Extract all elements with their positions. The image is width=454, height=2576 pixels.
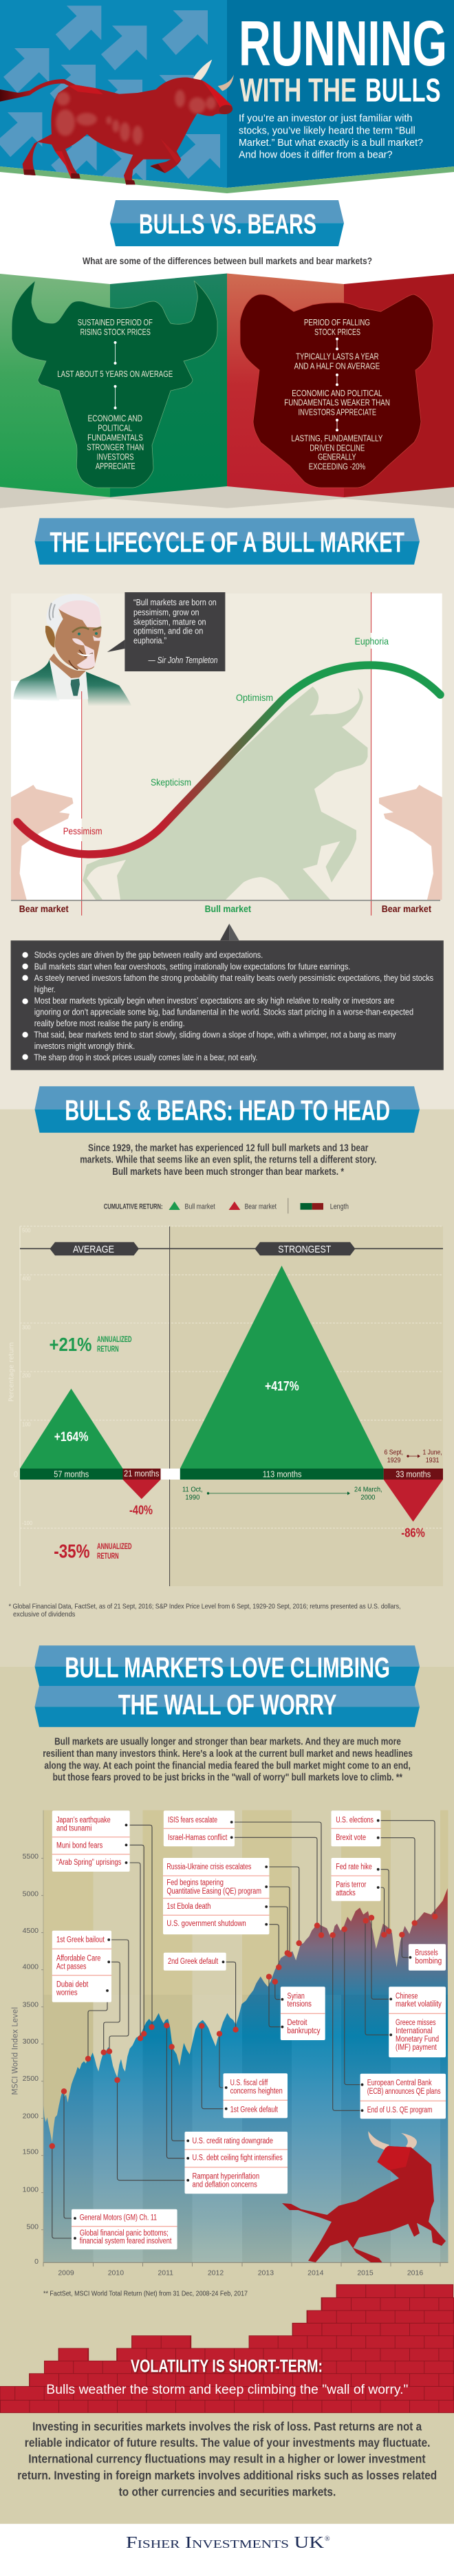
icon: rising arrows <box>0 6 220 193</box>
label: optimism: Optimism <box>236 692 273 703</box>
list: bear traits: ECONOMIC AND POLITICAL <box>292 389 382 398</box>
chart: MSCI World index with headlines <box>10 1810 448 2277</box>
footer logo <box>0 2524 454 2576</box>
callout: 2009 crisis: Global financial panic bottoms; <box>80 2229 169 2238</box>
callout: fiscal cliff: concerns heighten <box>230 2087 283 2095</box>
footnote: index source: ** FactSet, MSCI World Total Return (Net) from 31 Dec, 2008-24 Feb, 2017 <box>43 2289 248 2297</box>
legend: Bull market <box>184 1202 215 1211</box>
axis: years: 2009 <box>58 2269 74 2277</box>
label: average <box>50 1242 139 1255</box>
callout: China and Greece: International <box>396 2027 432 2035</box>
dates: strongest bear: 1931 <box>426 1456 440 1464</box>
callout: Templeton quote <box>107 592 225 671</box>
icon: bear head <box>240 294 433 488</box>
panel: bear market traits <box>227 274 454 497</box>
list: bear traits <box>284 318 390 472</box>
annualized bear return: RETURN <box>97 1551 119 1561</box>
intro text: And how does it differ from a bear? <box>239 149 392 160</box>
title <box>239 8 447 109</box>
panel: header <box>0 0 454 193</box>
dates: strongest bull: 2000 <box>360 1493 376 1502</box>
callout: 2009-2010 headlines: Act passes <box>56 1962 87 1971</box>
text: wall of worry intro <box>43 1737 413 1784</box>
heading: wall of worry <box>34 1645 420 1727</box>
callout: China and Greece: market volatility <box>396 2000 442 2009</box>
callout: 2011 US concerns <box>184 2132 288 2194</box>
list: bull traits <box>57 318 173 471</box>
axis: years: 2012 <box>208 2269 224 2277</box>
panel: lifecycle notes: Stocks cycles are driven by the gap between reality and expectations. <box>34 951 263 960</box>
label: bull market: Bull market <box>205 903 251 914</box>
list: bull traits: APPRECIATE <box>96 462 136 471</box>
axis labels: 200 <box>22 1373 31 1379</box>
axis labels: 100 <box>22 1421 31 1427</box>
callout: Templeton quote: pessimism, grow on <box>133 607 199 617</box>
icon: red bull climbing <box>282 2131 446 2262</box>
text: head to head intro: markets. While that seems like an even split, the returns tell a different story. <box>80 1155 377 1166</box>
callout: Brussels bombing: bombing <box>415 1957 442 1965</box>
panel: lifecycle notes: Most bear markets typically begin when investors’ expectations are sky high relative to reality or investors are <box>34 996 394 1006</box>
callout: fiscal cliff: U.S. fiscal cliff <box>230 2079 268 2088</box>
axis: years: 2011 <box>158 2269 173 2277</box>
axis: y levels: 3500 <box>23 2000 39 2009</box>
panel: lifecycle notes: Bull markets start when fear overshoots, setting irrationally low expectations for future earnings. <box>34 962 350 971</box>
annualized bear return: ANNUALIZED <box>97 1541 132 1551</box>
panel: bull market traits <box>0 274 227 497</box>
callout: 2009-2010 headlines: 1st Greek bailout <box>56 1936 105 1944</box>
dates: strongest bull: 24 March, <box>354 1485 382 1493</box>
label: strongest: STRONGEST <box>278 1244 331 1255</box>
callout: 2009-2010 headlines: Affordable Care <box>56 1955 100 1963</box>
footer logo: ® <box>325 2535 330 2543</box>
axis: years: 2015 <box>357 2269 374 2277</box>
chart: average and strongest cycles <box>8 1226 443 1586</box>
average bull triangle <box>20 1389 122 1469</box>
dates: strongest bull <box>182 1485 382 1502</box>
text: head to head intro <box>80 1143 377 1178</box>
heading: volatility: VOLATILITY IS SHORT-TERM: <box>131 2355 323 2376</box>
subheading question: What are some of the differences between bull markets and bear markets? <box>83 256 372 266</box>
callout: late 2015 <box>332 1858 381 1901</box>
callout: 2013-2014 headlines: 1st Ebola death <box>166 1903 210 1911</box>
legend: Bear market <box>245 1202 277 1211</box>
panel: lifecycle notes: That said, bear markets tend to start slowly, sliding down a slope of hope, with a whimper, not a bang as many <box>34 1030 396 1039</box>
axis labels <box>8 1228 33 1526</box>
callout: 2009 crisis <box>72 2209 177 2249</box>
axis: y levels: 5500 <box>23 1852 39 1861</box>
axis: y levels: 2500 <box>23 2075 39 2083</box>
panel: lifecycle notes: reality before most realise the party is ending. <box>34 1019 185 1028</box>
text: risk disclaimer: to other currencies and securities markets. <box>119 2485 336 2498</box>
footnote: head to head <box>9 1602 401 1619</box>
axis: years: 2013 <box>258 2269 274 2277</box>
dates: strongest bear: 6 Sept, <box>384 1448 403 1456</box>
legend: Length <box>330 1202 349 1211</box>
callout: China and Greece <box>389 1987 446 2057</box>
footnote: head to head: exclusive of dividends <box>13 1610 75 1619</box>
callout: 2011 US concerns: and deflation concerns <box>193 2180 257 2189</box>
callout: Syrian tensions and Detroit: tensions <box>288 2000 312 2009</box>
callout: 2013-2014 headlines: Fed begins tapering <box>166 1879 224 1887</box>
average bear triangle: -40% <box>129 1504 153 1517</box>
label: strongest <box>255 1242 355 1255</box>
callout: 2009-2010 headlines: worries <box>56 1989 78 1998</box>
average bear triangle <box>122 1480 161 1517</box>
callout: 2009 crisis: General Motors (GM) Ch. 11 <box>80 2214 157 2222</box>
callout: 2016 votes: Brexit vote <box>336 1834 366 1842</box>
callout: 2011 headlines: Muni bond fears <box>56 1842 103 1850</box>
callout: central banks <box>360 2074 446 2119</box>
callout: fiscal cliff: 1st Greek default <box>230 2106 279 2114</box>
callout: Syrian tensions and Detroit: Syrian <box>288 1992 305 2000</box>
title: WITH THE <box>239 73 356 109</box>
callout: 2013-2014 headlines: Russia-Ukraine crisis escalates <box>166 1863 251 1871</box>
axis: y levels: 0 <box>34 2258 39 2266</box>
text: risk disclaimer <box>17 2419 437 2498</box>
length bars <box>20 1469 443 1480</box>
strongest bull triangle: +417% <box>265 1380 299 1394</box>
callout: Syrian tensions and Detroit: Detroit <box>288 2019 307 2027</box>
legend <box>104 1198 349 1213</box>
callout: 2nd Greek default <box>164 1953 226 1971</box>
callout: China and Greece: Chinese <box>396 1992 418 2000</box>
heading: head to head <box>34 1086 420 1133</box>
label: euphoria: Euphoria <box>355 636 389 647</box>
axis: years <box>43 2262 448 2277</box>
line: market cycle curve <box>17 665 440 854</box>
strongest bull triangle <box>180 1266 384 1469</box>
callout: 2013-2014 headlines: Quantitative Easing (QE) program <box>166 1887 261 1896</box>
heading: wall of worry: THE WALL OF WORRY <box>118 1689 336 1721</box>
callout: 2016 votes: U.S. elections <box>336 1816 374 1824</box>
text: volatility subtitle: Bulls weather the storm and keep climbing the "wall of worry." <box>46 2383 408 2397</box>
area: index level <box>43 1888 448 2262</box>
callout: Templeton quote: “Bull markets are born on <box>133 598 217 607</box>
callout: 2009-2010 headlines: Dubai debt <box>56 1980 89 1989</box>
strongest bear triangle: -86% <box>401 1526 425 1539</box>
event markers <box>50 1914 438 2149</box>
dates: strongest bull: 1990 <box>185 1493 200 1502</box>
list: bear traits: AND A HALF ON AVERAGE <box>294 362 380 371</box>
axis labels: 0 <box>14 1470 18 1480</box>
label: skepticism: Skepticism <box>151 777 191 788</box>
callout: China and Greece: Monetary Fund <box>396 2035 439 2044</box>
axis: y levels: 1000 <box>23 2186 39 2194</box>
list: bear traits: GENERALLY <box>318 453 356 462</box>
callout: 2009-2010 headlines <box>52 1931 111 2002</box>
list: bull traits: LAST ABOUT 5 YEARS ON AVERAGE <box>57 369 173 379</box>
callout: 2011 headlines: Japan’s earthquake <box>56 1816 111 1824</box>
heading: bulls vs bears: BULLS VS. BEARS <box>139 208 316 239</box>
callout: 2011 US concerns: U.S. credit rating downgrade <box>193 2137 273 2145</box>
callout: late 2015: Fed rate hike <box>336 1863 372 1871</box>
list: bull traits: SUSTAINED PERIOD OF <box>78 318 153 327</box>
heading: lifecycle <box>34 518 420 565</box>
annualized bear return <box>54 1540 132 1561</box>
list: bear traits: FUNDAMENTALS WEAKER THAN <box>284 398 390 407</box>
callout: Syrian tensions and Detroit: bankruptcy <box>288 2027 321 2035</box>
annualized bull return: +21% <box>50 1334 91 1355</box>
footer logo: Fisher Investments UK <box>126 2534 325 2552</box>
icon: bull silhouette <box>83 686 367 900</box>
annualized bear return: -35% <box>54 1540 90 1561</box>
callout: 2014 conflicts: ISIS fears escalate <box>168 1816 217 1824</box>
axis labels: 300 <box>22 1325 31 1331</box>
axis: y levels <box>10 1810 43 2266</box>
strongest bear triangle <box>384 1480 443 1539</box>
text: head to head intro: Since 1929, the market has experienced 12 full bull markets and 13 bear <box>88 1143 369 1154</box>
axis: y levels: 500 <box>26 2223 39 2231</box>
list: bear traits: TYPICALLY LASTS A YEAR <box>296 352 378 362</box>
list: bull traits: FUNDAMENTALS <box>87 433 143 443</box>
panel: lifecycle notes <box>11 924 444 1070</box>
label: bear market right: Bear market <box>382 903 431 914</box>
axis: years: 2010 <box>108 2269 124 2277</box>
list: bear traits: STOCK PRICES <box>314 327 360 337</box>
callout: 2011 headlines: and tsunami <box>56 1825 91 1833</box>
annualized bull return: RETURN <box>97 1344 119 1354</box>
axis: y levels: 5000 <box>23 1890 39 1898</box>
callout: 2011 headlines: “Arab Spring” uprisings <box>56 1859 121 1867</box>
panel: lifecycle notes: higher. <box>34 985 56 995</box>
icon: red bull <box>0 60 234 184</box>
axis labels: Percentage return <box>8 1342 15 1402</box>
list: bull traits: ECONOMIC AND <box>88 414 142 424</box>
callout: 2014 conflicts <box>164 1810 235 1846</box>
panel: lifecycle notes: The sharp drop in stock prices usually comes late in a bear, not early. <box>34 1052 257 1062</box>
length bars: 21 months <box>124 1469 160 1479</box>
axis labels: 500 <box>22 1228 31 1234</box>
callout: late 2015: attacks <box>336 1890 356 1898</box>
callout: China and Greece: Greece misses <box>396 2019 436 2027</box>
intro text: If you’re an investor or just familiar with <box>239 113 413 125</box>
callout: 2013-2014 headlines <box>163 1858 269 1934</box>
dates: strongest bull: 11 Oct, <box>182 1485 203 1493</box>
length bars: 57 months <box>54 1469 89 1479</box>
axis labels: -100 <box>22 1520 33 1526</box>
list: bear traits: LASTING, FUNDAMENTALLY <box>291 433 383 443</box>
axis: years: 2016 <box>407 2269 423 2277</box>
panel: lifecycle notes: investors might wrongly think. <box>34 1041 135 1051</box>
axis: y levels: 2000 <box>23 2112 39 2120</box>
average bull triangle: +164% <box>54 1430 88 1444</box>
list: bear traits: DRIVEN DECLINE <box>310 443 365 453</box>
callout: China and Greece: (IMF) payment <box>396 2044 437 2052</box>
label: average: AVERAGE <box>73 1244 114 1255</box>
callout: 2009 crisis: financial system feared insolvent <box>80 2237 172 2245</box>
callout: late 2015: Paris terror <box>336 1881 367 1889</box>
axis: years: 2014 <box>307 2269 324 2277</box>
heading: bulls vs bears <box>110 200 344 246</box>
callout: Templeton quote: optimism, and die on <box>133 627 203 636</box>
axis: y levels: 4000 <box>23 1963 39 1971</box>
icon: bull head <box>12 281 217 488</box>
icon: bear silhouette left <box>11 785 73 900</box>
list: bear traits: INVESTORS APPRECIATE <box>299 407 376 417</box>
axis: y levels: MSCI World Index Level <box>10 2007 19 2095</box>
dates: strongest bear: 1929 <box>387 1456 401 1464</box>
list: bull traits: INVESTORS <box>97 453 133 462</box>
intro text: stocks, you’ve likely heard the term “Bull <box>239 125 415 136</box>
dates: strongest bear: 1 June, <box>422 1448 442 1456</box>
list: bull traits: STRONGER THAN <box>87 443 144 453</box>
label: bear market left: Bear market <box>19 903 69 914</box>
legend: CUMULATIVE RETURN: <box>104 1202 162 1211</box>
icon: Sir John Templeton portrait <box>13 594 132 706</box>
leader lines <box>52 1821 435 2238</box>
callout: Brussels bombing <box>409 1944 446 1971</box>
label: pessimism: Pessimism <box>63 825 102 836</box>
list: bear traits: EXCEEDING -20% <box>309 462 365 472</box>
axis: y levels: 4500 <box>23 1927 39 1935</box>
callout: 2nd Greek default: 2nd Greek default <box>168 1958 219 1966</box>
dates: strongest bear <box>384 1448 442 1464</box>
callout: Syrian tensions and Detroit <box>281 1987 325 2040</box>
callout: central banks: End of U.S. QE program <box>367 2106 432 2114</box>
callout: Templeton quote: skepticism, mature on <box>133 617 206 627</box>
annualized bull return: ANNUALIZED <box>97 1334 132 1344</box>
list: bull traits: RISING STOCK PRICES <box>80 327 151 337</box>
length bars: 113 months <box>263 1469 302 1479</box>
callout: central banks: European Central Bank <box>367 2079 432 2088</box>
band under panels <box>0 481 454 508</box>
intro text <box>239 113 423 160</box>
callout: Brussels bombing: Brussels <box>415 1949 438 1958</box>
callout: 2011 US concerns: U.S. debt ceiling fight intensifies <box>193 2154 283 2163</box>
callout: Templeton quote: euphoria.” <box>133 636 166 646</box>
panel: brick wall <box>0 2284 454 2413</box>
list: bull traits: POLITICAL <box>98 424 132 433</box>
callout: 2016 votes <box>332 1810 381 1846</box>
icon: bear silhouette right <box>379 785 442 900</box>
axis: y levels: 3000 <box>23 2037 39 2046</box>
axis labels: 400 <box>22 1276 31 1282</box>
length bars: 33 months <box>396 1469 431 1479</box>
list: bear traits: PERIOD OF FALLING <box>304 318 370 327</box>
callout: fiscal cliff <box>223 2073 288 2118</box>
text: head to head intro: Bull markets have been much stronger than bear markets. * <box>112 1167 344 1178</box>
callout: 2011 headlines <box>52 1810 130 1872</box>
callout: 2011 US concerns: Rampant hyperinflation <box>193 2173 259 2181</box>
intro text: Market.” But what exactly is a bull market? <box>239 137 423 149</box>
callout: Templeton quote: — Sir John Templeton <box>148 656 218 665</box>
callout: 2013-2014 headlines: U.S. government shutdown <box>166 1920 246 1928</box>
annualized bull return <box>50 1334 132 1355</box>
chart: bull market lifecycle <box>11 592 442 916</box>
axis: y levels: 1500 <box>23 2148 39 2156</box>
callout: 2014 conflicts: Israel-Hamas conflict <box>168 1834 228 1842</box>
